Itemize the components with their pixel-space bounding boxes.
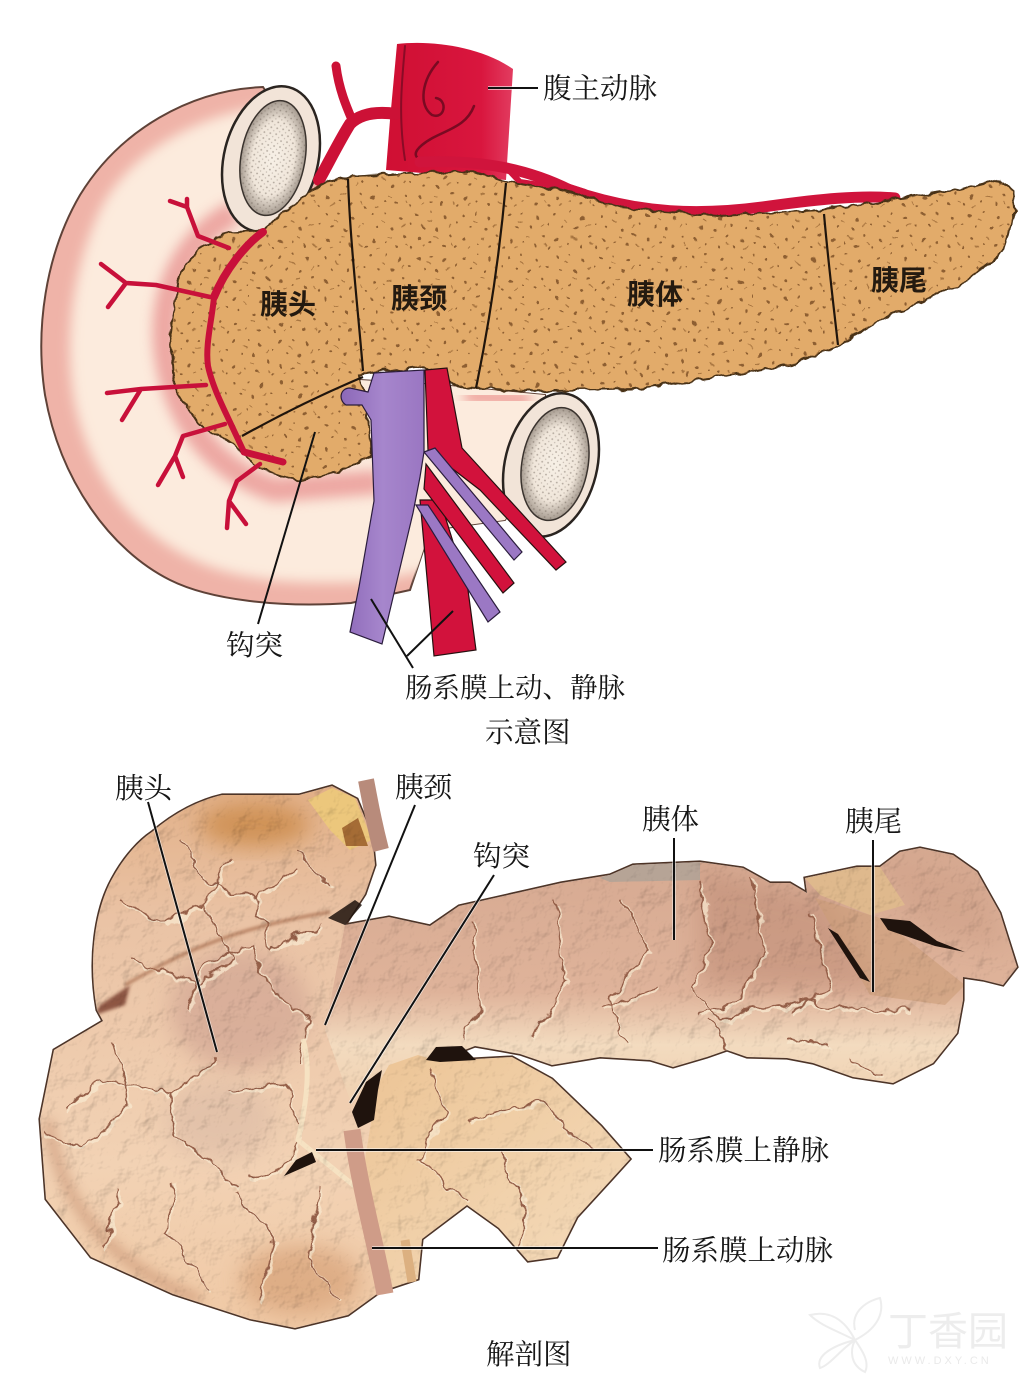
label: 肠系膜上动脉: 肠系膜上动脉 xyxy=(662,1235,834,1267)
label: 钩突 xyxy=(226,432,315,662)
celiac trunk and splenic artery xyxy=(319,46,895,212)
label: 胰体: 胰体 xyxy=(627,279,683,310)
label: 肠系膜上静脉: 肠系膜上静脉 xyxy=(658,1135,830,1167)
label: 胰颈: 胰颈 xyxy=(395,772,453,804)
label: 胰颈: 胰颈 xyxy=(391,283,447,314)
label: 胰体: 胰体 xyxy=(642,804,699,836)
anatomy photo: pancreas specimen xyxy=(40,772,1017,1371)
superior mesenteric artery xyxy=(420,368,566,656)
watermark: 丁香园: 丁香园 xyxy=(888,1310,1008,1354)
upper vessel xyxy=(366,780,381,850)
label: 胰颈 xyxy=(325,772,453,1025)
aorta xyxy=(386,43,513,180)
pancreas body xyxy=(170,171,1015,481)
specimen tissue xyxy=(40,786,1017,1328)
pancreas division lines xyxy=(242,179,838,436)
watermark: 丁香园: WWW.DXY.CN xyxy=(888,1355,992,1367)
caption: 示意图: 示意图 xyxy=(485,717,571,749)
label: 腹主动脉: 腹主动脉 xyxy=(543,73,658,105)
outline xyxy=(40,786,1017,1328)
label: 钩突: 钩突 xyxy=(473,841,530,873)
label: 胰头: 胰头 xyxy=(115,773,173,805)
superior mesenteric vein xyxy=(341,370,522,644)
label: 胰头 xyxy=(115,773,217,1052)
caption: 解剖图: 解剖图 xyxy=(486,1339,572,1371)
diagram: schematic pancreas xyxy=(41,43,1015,749)
label: 钩突: 钩突 xyxy=(226,630,283,662)
mesenteric vessels xyxy=(352,1130,412,1294)
label: 肠系膜上动、静脉 xyxy=(371,599,625,703)
label: 肠系膜上动、静脉: 肠系膜上动、静脉 xyxy=(405,672,625,703)
label: 胰尾: 胰尾 xyxy=(871,265,927,296)
lower duodenum cross-section xyxy=(489,383,613,547)
dark crevices xyxy=(284,900,965,1176)
label: 胰体 xyxy=(642,804,699,940)
top duodenum cross-section xyxy=(207,76,335,242)
duodenum xyxy=(41,87,600,604)
label: 胰头: 胰头 xyxy=(260,289,316,320)
label: 胰尾: 胰尾 xyxy=(845,806,902,838)
gastroduodenal arteries xyxy=(101,199,283,528)
label: 钩突 xyxy=(350,841,530,1103)
watermark: 丁香园 xyxy=(810,1298,1008,1372)
